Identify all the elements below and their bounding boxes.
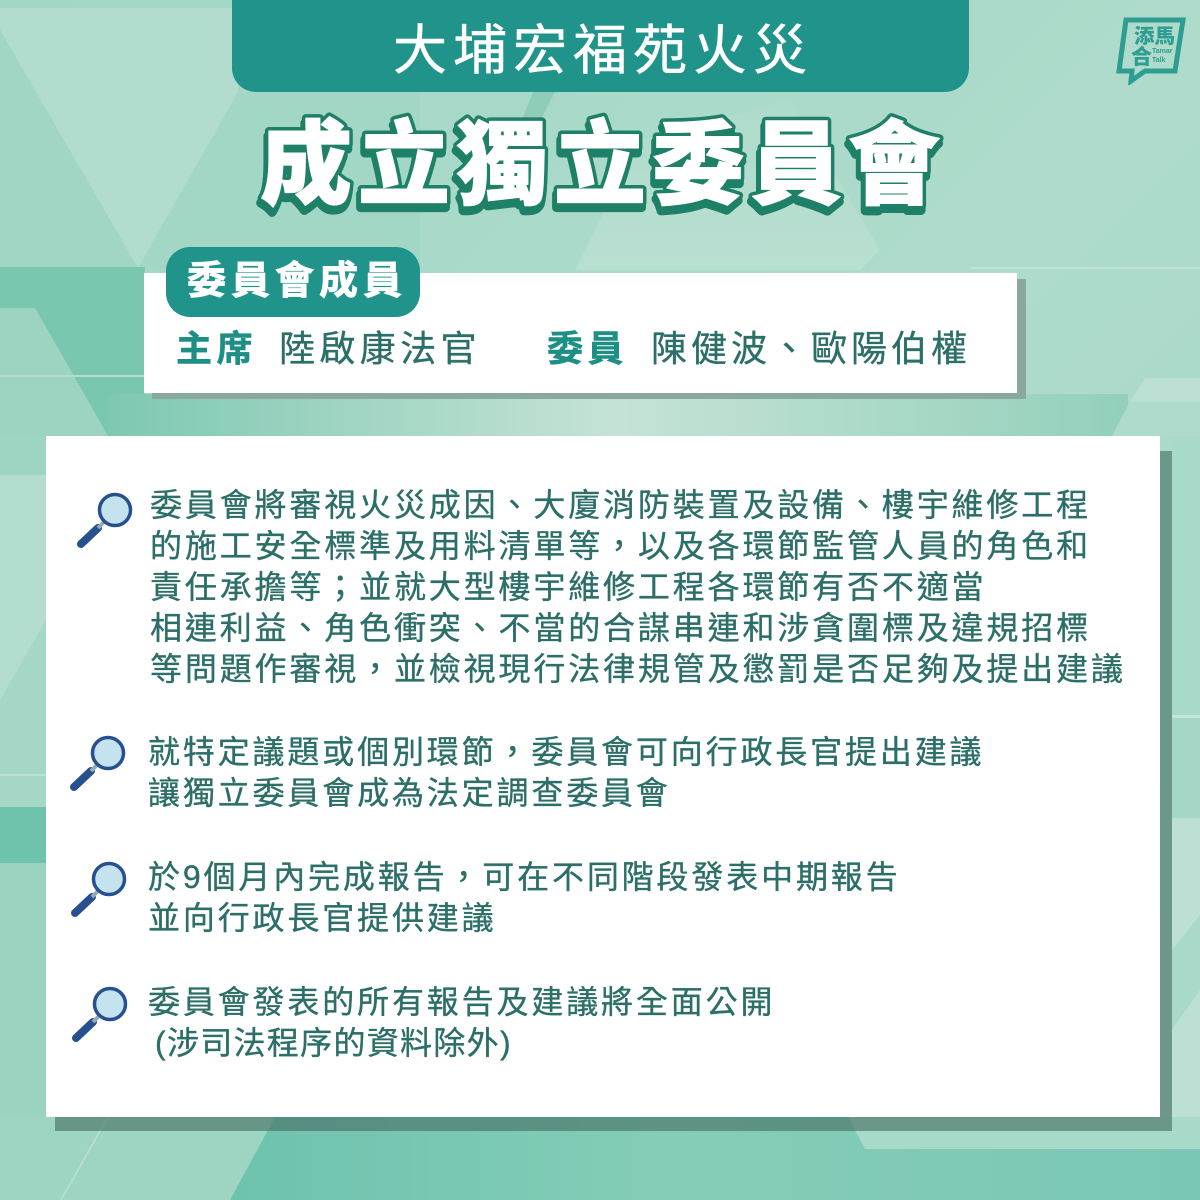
banner title: 大埔宏福苑火災: [393, 21, 813, 81]
main heading: 立: [358, 91, 450, 224]
text block 1: 的施工安全標準及用料清單等，以及各環節監管人員的角色和: [150, 528, 1091, 564]
panel shadow: [152, 279, 1026, 399]
icon: magnifier 1: [77, 492, 132, 548]
text block 1: 等問題作審視，並檢視現行法律規管及懲罰是否足夠及提出建議: [150, 651, 1126, 687]
main heading: 獨: [456, 91, 548, 224]
main panel shadow: [55, 451, 1172, 1131]
main heading: [256, 91, 944, 229]
main heading: 立: [358, 91, 450, 224]
logo: Tamar Talk: 添馬: [1134, 20, 1175, 49]
text block 4: (涉司法程序的資料除外): [155, 1025, 512, 1061]
main panel: [46, 436, 1160, 1117]
top header banner: [232, 0, 969, 92]
main heading: 立: [553, 96, 645, 229]
main heading: 委: [652, 91, 744, 224]
members label pill: [166, 247, 420, 317]
logo: Tamar Talk: 合: [1131, 41, 1152, 71]
main heading: 員: [750, 91, 842, 224]
main heading: 立: [554, 91, 646, 224]
main heading: 立: [554, 91, 646, 224]
main heading: 會: [848, 91, 940, 224]
icon: magnifier 4: [72, 986, 128, 1042]
logo: Tamar Talk: [1116, 18, 1186, 85]
icon: magnifier 3: [71, 862, 126, 917]
main heading: 員: [750, 91, 842, 224]
logo: Tamar Talk: Talk: [1152, 57, 1166, 64]
main heading: 獨: [455, 96, 547, 229]
text block 2: 讓獨立委員會成為法定調查委員會: [148, 775, 671, 811]
panel body: [144, 273, 1017, 393]
main heading: 成: [259, 96, 351, 229]
main heading: 會: [847, 96, 939, 229]
text block 2: 就特定議題或個別環節，委員會可向行政長官提出建議: [148, 734, 984, 770]
text block 1: 相連利益、角色衝突、不當的合謀串連和涉貪圍標及違規招標: [150, 610, 1091, 646]
text block 1: [150, 487, 1126, 687]
text block 4: [148, 984, 775, 1061]
member names: 陳健波、歐陽伯權: [651, 328, 971, 369]
text block 2: [148, 734, 984, 811]
icon: magnifier 2: [70, 736, 126, 791]
main heading: 成: [260, 91, 352, 224]
chairman name: 陸啟康法官: [279, 328, 481, 369]
text block 1: 責任承擔等；並就大型樓宇維修工程各環節有否不適當: [150, 569, 986, 605]
panel: committee members: [144, 247, 1026, 399]
text block 3: 並向行政長官提供建議: [148, 900, 497, 936]
chairman role: 主席: [176, 328, 257, 369]
main heading: 會: [848, 91, 940, 224]
main heading: 成: [260, 91, 352, 224]
text block 3: [148, 859, 900, 936]
main heading: 獨: [456, 91, 548, 224]
main heading: 委: [651, 96, 743, 229]
text block 1: 委員會將審視火災成因、大廈消防裝置及設備、樓宇維修工程: [150, 487, 1091, 523]
main heading: 立: [357, 96, 449, 229]
main heading: 委: [652, 91, 744, 224]
main heading: 員: [749, 96, 841, 229]
logo: Tamar Talk: Tamar: [1152, 48, 1173, 55]
member role: 委員: [547, 328, 628, 369]
text block 4: 委員會發表的所有報告及建議將全面公開: [148, 984, 775, 1020]
members label text: 委員會成員: [187, 260, 407, 303]
text block 3: 於9個月內完成報告，可在不同階段發表中期報告: [148, 859, 900, 895]
